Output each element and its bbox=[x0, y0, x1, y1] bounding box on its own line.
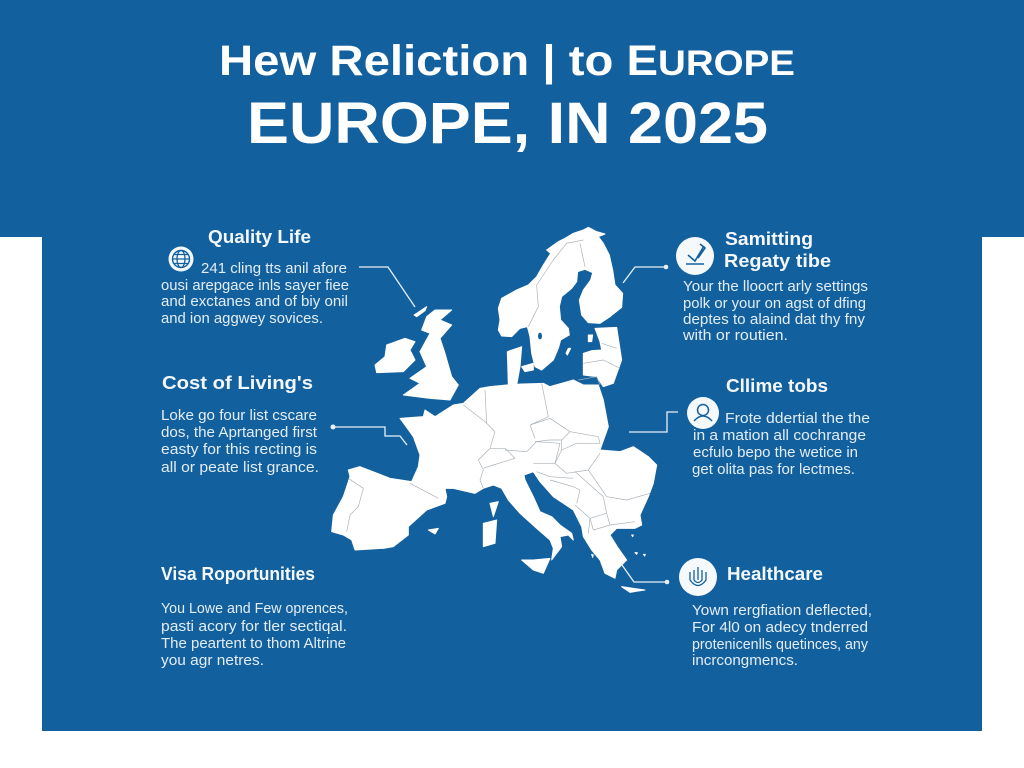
panel: Climate bbox=[687, 375, 870, 478]
text: Quality Life body: and ion aggwey sovices. bbox=[161, 311, 323, 327]
text: Cost of Living body: all or peate list grance. bbox=[161, 460, 319, 476]
Corsica bbox=[490, 502, 498, 517]
Swedish lake bbox=[538, 333, 542, 339]
connector arrow: Quality Life to Britain bbox=[359, 267, 415, 307]
text: Healthcare body: Yown rergfiation deflected, bbox=[692, 603, 872, 619]
connector arrow: Climate to Eastern Europe bbox=[629, 412, 678, 432]
text: Cost of Living body bbox=[161, 408, 319, 476]
Sardinia bbox=[483, 520, 497, 547]
text: Samitting body: deptes to alaind dat thy fny bbox=[683, 312, 866, 328]
country borders bbox=[347, 240, 650, 533]
heading: Healthcare: Healthcare bbox=[727, 563, 823, 584]
panel: Healthcare bbox=[679, 558, 872, 669]
text: Cost of Living body: easty for this recting is bbox=[161, 442, 317, 458]
heading: Visa Roportunities: Visa Roportunities bbox=[161, 563, 315, 584]
icon: globe bbox=[168, 246, 194, 272]
heading: Samitting Regaty tibe: Samitting bbox=[725, 228, 813, 249]
heading: Samitting Regaty tibe: Regaty tibe bbox=[724, 250, 831, 271]
text: Quality Life body: 241 cling tts anil afore bbox=[201, 261, 347, 277]
text: Climate body: get olita pas for lectmes. bbox=[692, 462, 855, 478]
Great Britain bbox=[403, 310, 458, 400]
Sicily bbox=[522, 558, 550, 573]
text: Climate body: ecfulo bepo the wetice in bbox=[693, 445, 858, 461]
connector arrow: Samitting to Finland bbox=[623, 265, 668, 283]
title: Hew Reliction | to E UROPE bbox=[219, 37, 795, 85]
text: Quality Life body: ousi arepgace inls sayer fiee bbox=[161, 278, 349, 294]
map of Europe bbox=[332, 227, 657, 592]
text: Cost of Living body: Loke go four list cscare bbox=[161, 408, 317, 424]
Greek islands bbox=[592, 535, 645, 557]
text: Healthcare body: protenicenlls quetinces, any bbox=[692, 637, 869, 653]
text: Visa body: you agr netres. bbox=[161, 653, 264, 669]
connector arrow: Healthcare to Greece bbox=[622, 565, 669, 584]
text: Samitting body: with or routien. bbox=[682, 328, 788, 344]
heading: Cllime tobs: Cllime tobs bbox=[726, 375, 828, 396]
icon: power symbol bbox=[679, 558, 717, 596]
connector arrow: Cost of Living to France bbox=[330, 424, 407, 445]
text: Climate body: in a mation all cochrange bbox=[693, 428, 866, 444]
text: Climate body bbox=[692, 411, 870, 478]
icon: pen bbox=[676, 237, 714, 275]
text: Visa body: You Lowe and Few oprences, bbox=[161, 601, 348, 617]
text: Climate body: Frote ddertial the the bbox=[725, 411, 870, 427]
text: Cost of Living body: dos, the Aprtanged first bbox=[161, 425, 317, 441]
Scandinavia bbox=[498, 227, 623, 370]
panel: Visa Opportunities bbox=[161, 563, 348, 669]
title: EUROPE, IN 2025 bbox=[247, 91, 768, 156]
title bbox=[219, 37, 795, 156]
panel: Cost of Living bbox=[161, 372, 319, 476]
text: Samitting body: Your the lloocrt arly settings bbox=[683, 279, 868, 295]
Ireland bbox=[375, 338, 415, 373]
text: Healthcare body: For 4l0 on adecy tnderred bbox=[692, 620, 868, 636]
text: Healthcare body: incrcongmencs. bbox=[692, 653, 798, 669]
text: Quality Life body bbox=[161, 261, 349, 327]
text: Samitting body: polk or your on agst of dfing bbox=[683, 296, 866, 312]
panel: Quality Life bbox=[161, 226, 349, 327]
heading: Quality Life: Quality Life bbox=[208, 226, 311, 247]
text: Visa body: pasti acory for tler sectiqal. bbox=[161, 619, 347, 635]
text: Visa body bbox=[161, 601, 348, 669]
blue main panel bbox=[42, 237, 982, 731]
Scottish isles bbox=[414, 307, 427, 317]
Balearic Islands bbox=[428, 528, 438, 534]
heading: Samitting Regaty tibe bbox=[724, 228, 831, 271]
Baltic states bbox=[583, 327, 622, 387]
panel: Samitting Regaty bbox=[676, 228, 868, 344]
Gotland bbox=[566, 348, 571, 355]
heading: Cost of Living: Cost of Living's bbox=[162, 372, 313, 393]
Crete bbox=[622, 587, 645, 592]
text: Samitting body bbox=[682, 279, 868, 344]
Denmark bbox=[507, 347, 522, 385]
Danish islands bbox=[522, 363, 533, 372]
icon: magnifier bbox=[687, 397, 719, 429]
text: Quality Life body: and exctanes and of biy onil bbox=[161, 294, 348, 310]
Saaremaa bbox=[588, 335, 593, 342]
text: Healthcare body bbox=[692, 603, 872, 669]
continental Europe bbox=[332, 380, 657, 578]
text: Visa body: The peartent to thom Altrine bbox=[161, 636, 346, 652]
blue header band bbox=[0, 0, 1024, 237]
